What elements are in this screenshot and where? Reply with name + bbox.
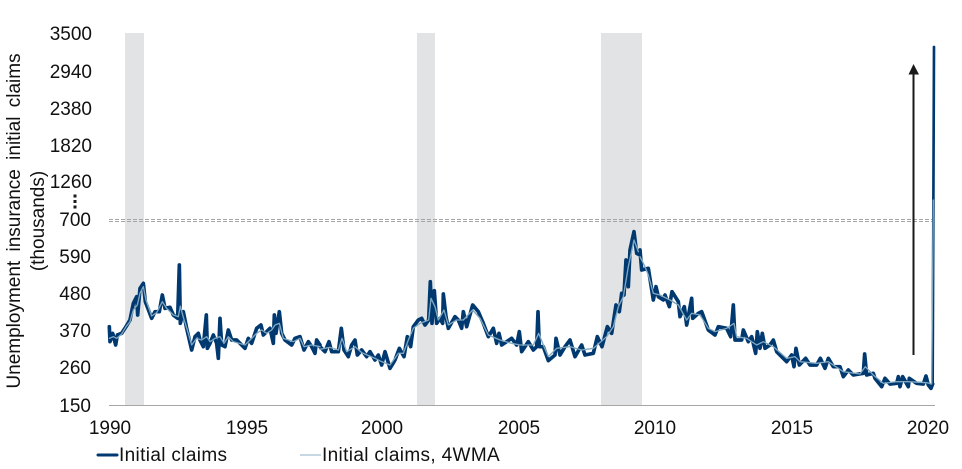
legend: initial claims: Initial claims [119, 445, 227, 466]
y axis title: (thousands) [28, 171, 49, 271]
y axis labels: 3500 [50, 24, 92, 45]
x axis labels [89, 418, 949, 439]
recession shading bands [125, 33, 642, 405]
axis break dashed lines [109, 220, 934, 222]
x axis labels: 2000 [361, 418, 403, 439]
x axis labels: 2010 [634, 418, 676, 439]
y axis labels: 1820 [50, 136, 92, 157]
y axis labels: 590 [59, 247, 91, 268]
x axis labels: 2005 [498, 418, 540, 439]
x axis line [109, 404, 935, 406]
y axis labels: 370 [59, 321, 91, 342]
y axis labels: 2380 [50, 99, 92, 120]
y axis labels: 150 [59, 396, 91, 417]
y axis labels: 1260 [50, 172, 92, 193]
y axis title: Unemployment insurance initial claims [4, 53, 25, 389]
arrow [908, 64, 919, 355]
x axis labels: 1990 [89, 418, 131, 439]
y axis labels: 2940 [50, 62, 92, 83]
x axis labels: 2015 [771, 418, 813, 439]
y axis labels: 700 [59, 210, 91, 231]
x axis labels: 1995 [226, 418, 268, 439]
axis break dots [74, 194, 76, 208]
y axis labels: 480 [59, 284, 91, 305]
legend: initial claims 4WMA: Initial claims, 4WMA [322, 445, 500, 466]
y axis title [4, 53, 49, 389]
x axis labels: 2020 [907, 418, 949, 439]
y axis labels [50, 24, 92, 417]
y axis labels: 260 [59, 358, 91, 379]
line series: initial claims 4WMA [109, 200, 933, 384]
line series: initial claims [109, 47, 934, 388]
